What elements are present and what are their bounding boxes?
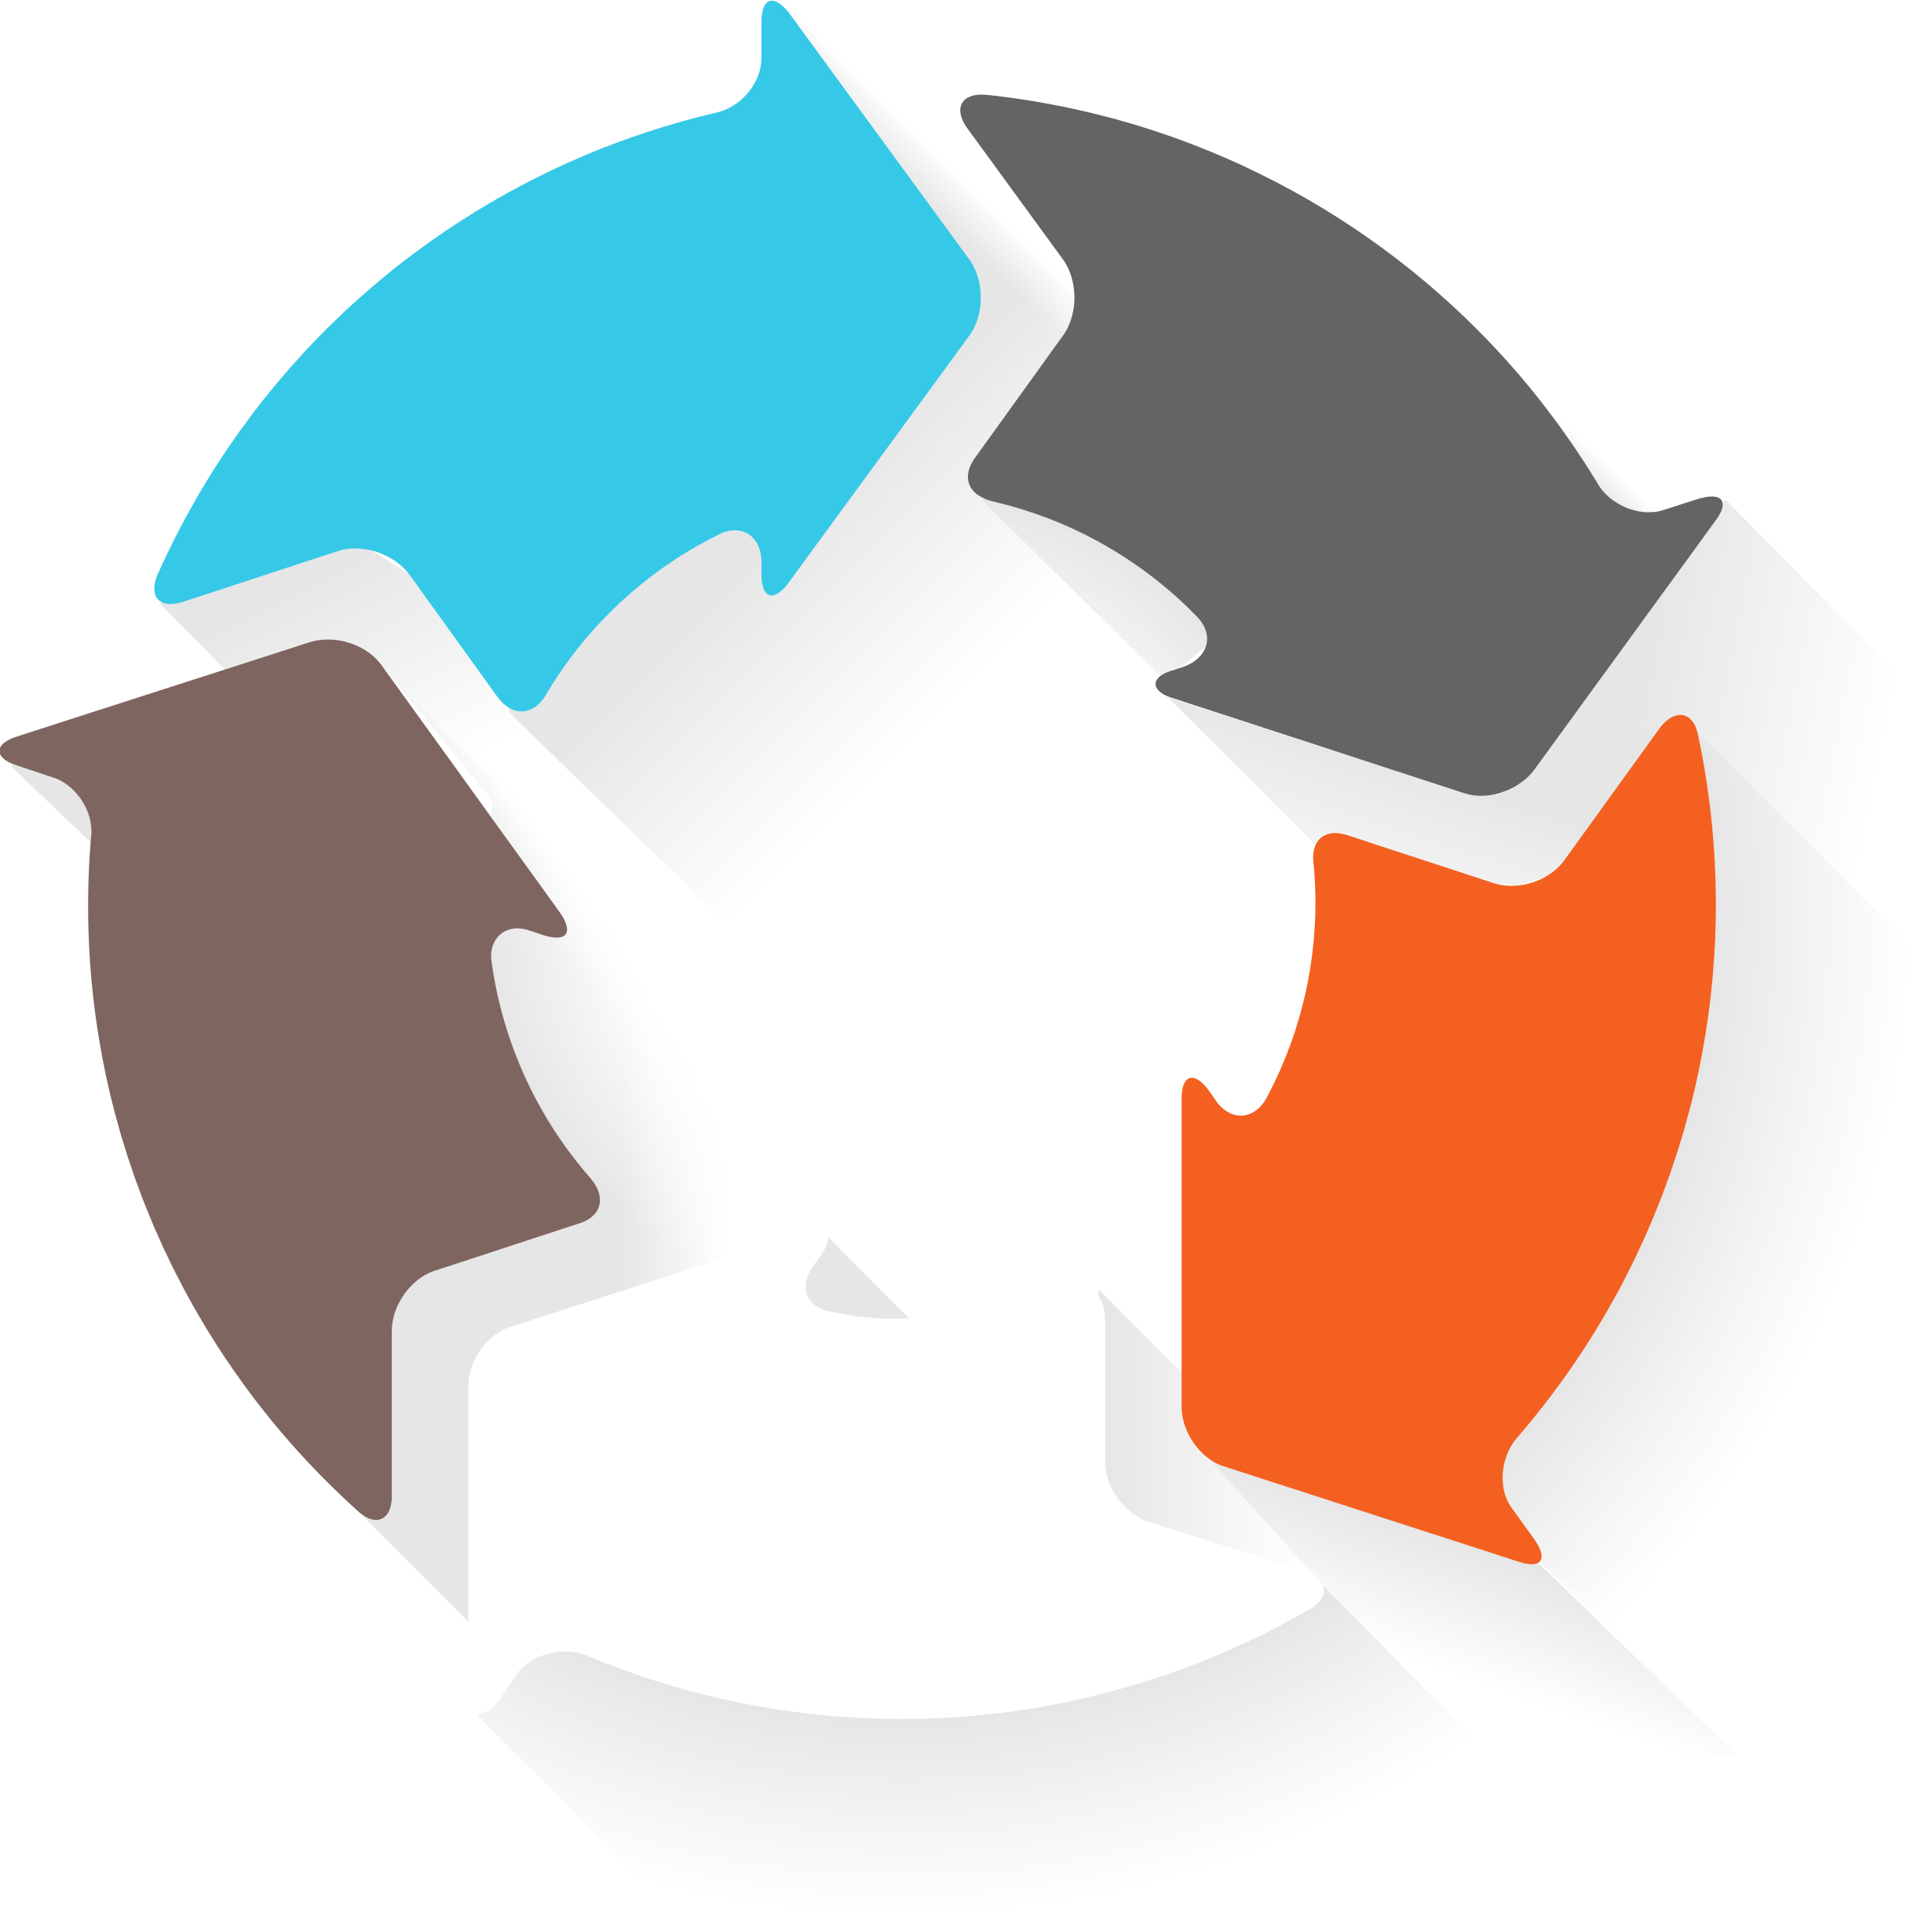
shadow: gray arrow right side (1534, 499, 1932, 973)
shadow: cyan arrow left side (160, 530, 703, 904)
arrow: dark gray (960, 95, 1722, 796)
arrow: cyan (155, 1, 981, 711)
shadow: orange arrow lower edge (1210, 1460, 1737, 1780)
shadow: brown arrow inner upper fade (381, 664, 760, 1269)
shadow: brown arrow inner (381, 664, 760, 1269)
shadow: brown arrow top left (10, 764, 91, 843)
arrow: white (468, 1230, 1324, 1719)
arrow: brown (0, 640, 600, 1520)
shadow: notch of white arrow (794, 1237, 909, 1324)
shadow: white arrow outer (478, 1584, 1528, 1928)
shadow: brown arrow lower (357, 1201, 727, 1621)
shadow: gray arrow lower edge (1168, 521, 1715, 893)
shadow: cyan arrow right side fade (509, 10, 1164, 924)
shadow: orange arrow inner (1084, 1290, 1322, 1590)
shadow: orange arrow outer (1478, 732, 1932, 1927)
arrow: orange (1181, 715, 1716, 1565)
shadow: gray arrow inner curve (983, 480, 1214, 680)
shadow: cyan arrow right side (509, 10, 1164, 924)
shadow: brown arrow inner right fade (381, 664, 760, 1269)
shadow: gray arrow top notch (1478, 348, 1659, 524)
